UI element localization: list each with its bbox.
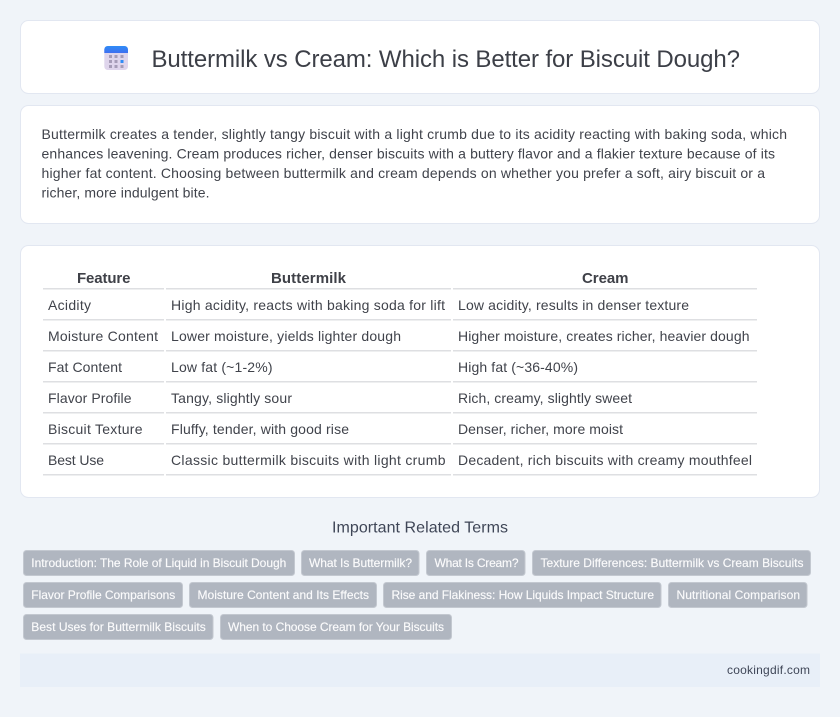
intro paragraph: Buttermilk creates a tender, slightly tangy biscuit with a light crumb due to its acidity reacting with baking soda, which bbox=[42, 126, 787, 142]
tag: Introduction: The Role of Liquid in Biscuit Dough bbox=[31, 556, 286, 570]
intro paragraph: higher fat content. Choosing between buttermilk and cream depends on whether you prefer a soft, airy biscuit or a bbox=[42, 165, 765, 181]
tag: Best Uses for Buttermilk Biscuits bbox=[31, 620, 206, 634]
panel: comparison table bbox=[20, 246, 820, 498]
tag: What Is Cream? bbox=[434, 556, 519, 570]
panel: intro bbox=[20, 106, 820, 224]
row: biscuit texture: Fluffy, tender, with good rise bbox=[171, 421, 349, 437]
intro paragraph: richer, more indulgent bite. bbox=[42, 184, 210, 200]
row: acidity: Acidity bbox=[48, 297, 91, 313]
tag: What Is Buttermilk? bbox=[309, 556, 412, 570]
row: flavor profile bbox=[48, 390, 632, 406]
tag: Flavor Profile Comparisons bbox=[31, 588, 175, 602]
tag: Moisture Content and Its Effects bbox=[198, 588, 369, 602]
table header row: Buttermilk bbox=[271, 270, 347, 287]
row: best use bbox=[48, 452, 752, 468]
tag: Nutritional Comparison bbox=[676, 588, 800, 602]
row: fat content bbox=[48, 359, 578, 375]
row: moisture content bbox=[48, 328, 750, 344]
row: moisture content: Lower moisture, yields lighter dough bbox=[171, 328, 401, 344]
icon: calendar bbox=[104, 46, 128, 70]
table header row: Feature bbox=[77, 270, 130, 287]
row: flavor profile: Flavor Profile bbox=[48, 390, 132, 406]
tag: Texture Differences: Buttermilk vs Cream Biscuits bbox=[540, 556, 804, 570]
tag bbox=[24, 550, 294, 576]
tag bbox=[302, 550, 419, 576]
related term tags bbox=[24, 550, 810, 640]
tag bbox=[532, 550, 810, 576]
row: acidity: Low acidity, results in denser texture bbox=[458, 297, 689, 313]
row: biscuit texture bbox=[48, 421, 623, 437]
row: biscuit texture: Denser, richer, more moist bbox=[458, 421, 623, 437]
tag: Rise and Flakiness: How Liquids Impact Structure bbox=[392, 588, 654, 602]
tag bbox=[426, 550, 525, 576]
title: Buttermilk vs Cream: Which is Better for Biscuit Dough? bbox=[152, 46, 740, 73]
row: fat content: Low fat (~1-2%) bbox=[171, 359, 272, 375]
intro paragraph: enhances leavening. Cream produces richer, denser biscuits with a buttery flavor and a flakier texture because of its bbox=[42, 146, 775, 162]
footer source text: cookingdif.com bbox=[727, 663, 810, 677]
tag: When to Choose Cream for Your Biscuits bbox=[228, 620, 444, 634]
table header row: Cream bbox=[582, 270, 628, 287]
row: acidity: High acidity, reacts with baking soda for lift bbox=[171, 297, 445, 313]
table header row bbox=[77, 270, 628, 287]
tag bbox=[24, 614, 213, 640]
row: best use: Best Use bbox=[48, 452, 104, 468]
intro paragraph bbox=[42, 126, 787, 200]
tag bbox=[24, 582, 182, 608]
row: fat content: High fat (~36-40%) bbox=[458, 359, 578, 375]
row: moisture content: Higher moisture, creates richer, heavier dough bbox=[458, 328, 750, 344]
row: best use: Decadent, rich biscuits with creamy mouthfeel bbox=[458, 452, 752, 468]
tag bbox=[190, 582, 376, 608]
row: biscuit texture: Biscuit Texture bbox=[48, 421, 143, 437]
footer bbox=[20, 654, 820, 687]
row: moisture content: Moisture Content bbox=[48, 328, 158, 344]
row: flavor profile: Tangy, slightly sour bbox=[171, 390, 292, 406]
tag bbox=[668, 582, 807, 608]
table rules bbox=[43, 288, 757, 476]
row: flavor profile: Rich, creamy, slightly sweet bbox=[458, 390, 632, 406]
row: best use: Classic buttermilk biscuits with light crumb bbox=[171, 452, 446, 468]
tag bbox=[220, 614, 452, 640]
tag bbox=[384, 582, 661, 608]
row: acidity bbox=[48, 297, 689, 313]
panel: header bbox=[20, 20, 820, 94]
row: fat content: Fat Content bbox=[48, 359, 122, 375]
heading: important related terms: Important Related Terms bbox=[332, 520, 508, 537]
